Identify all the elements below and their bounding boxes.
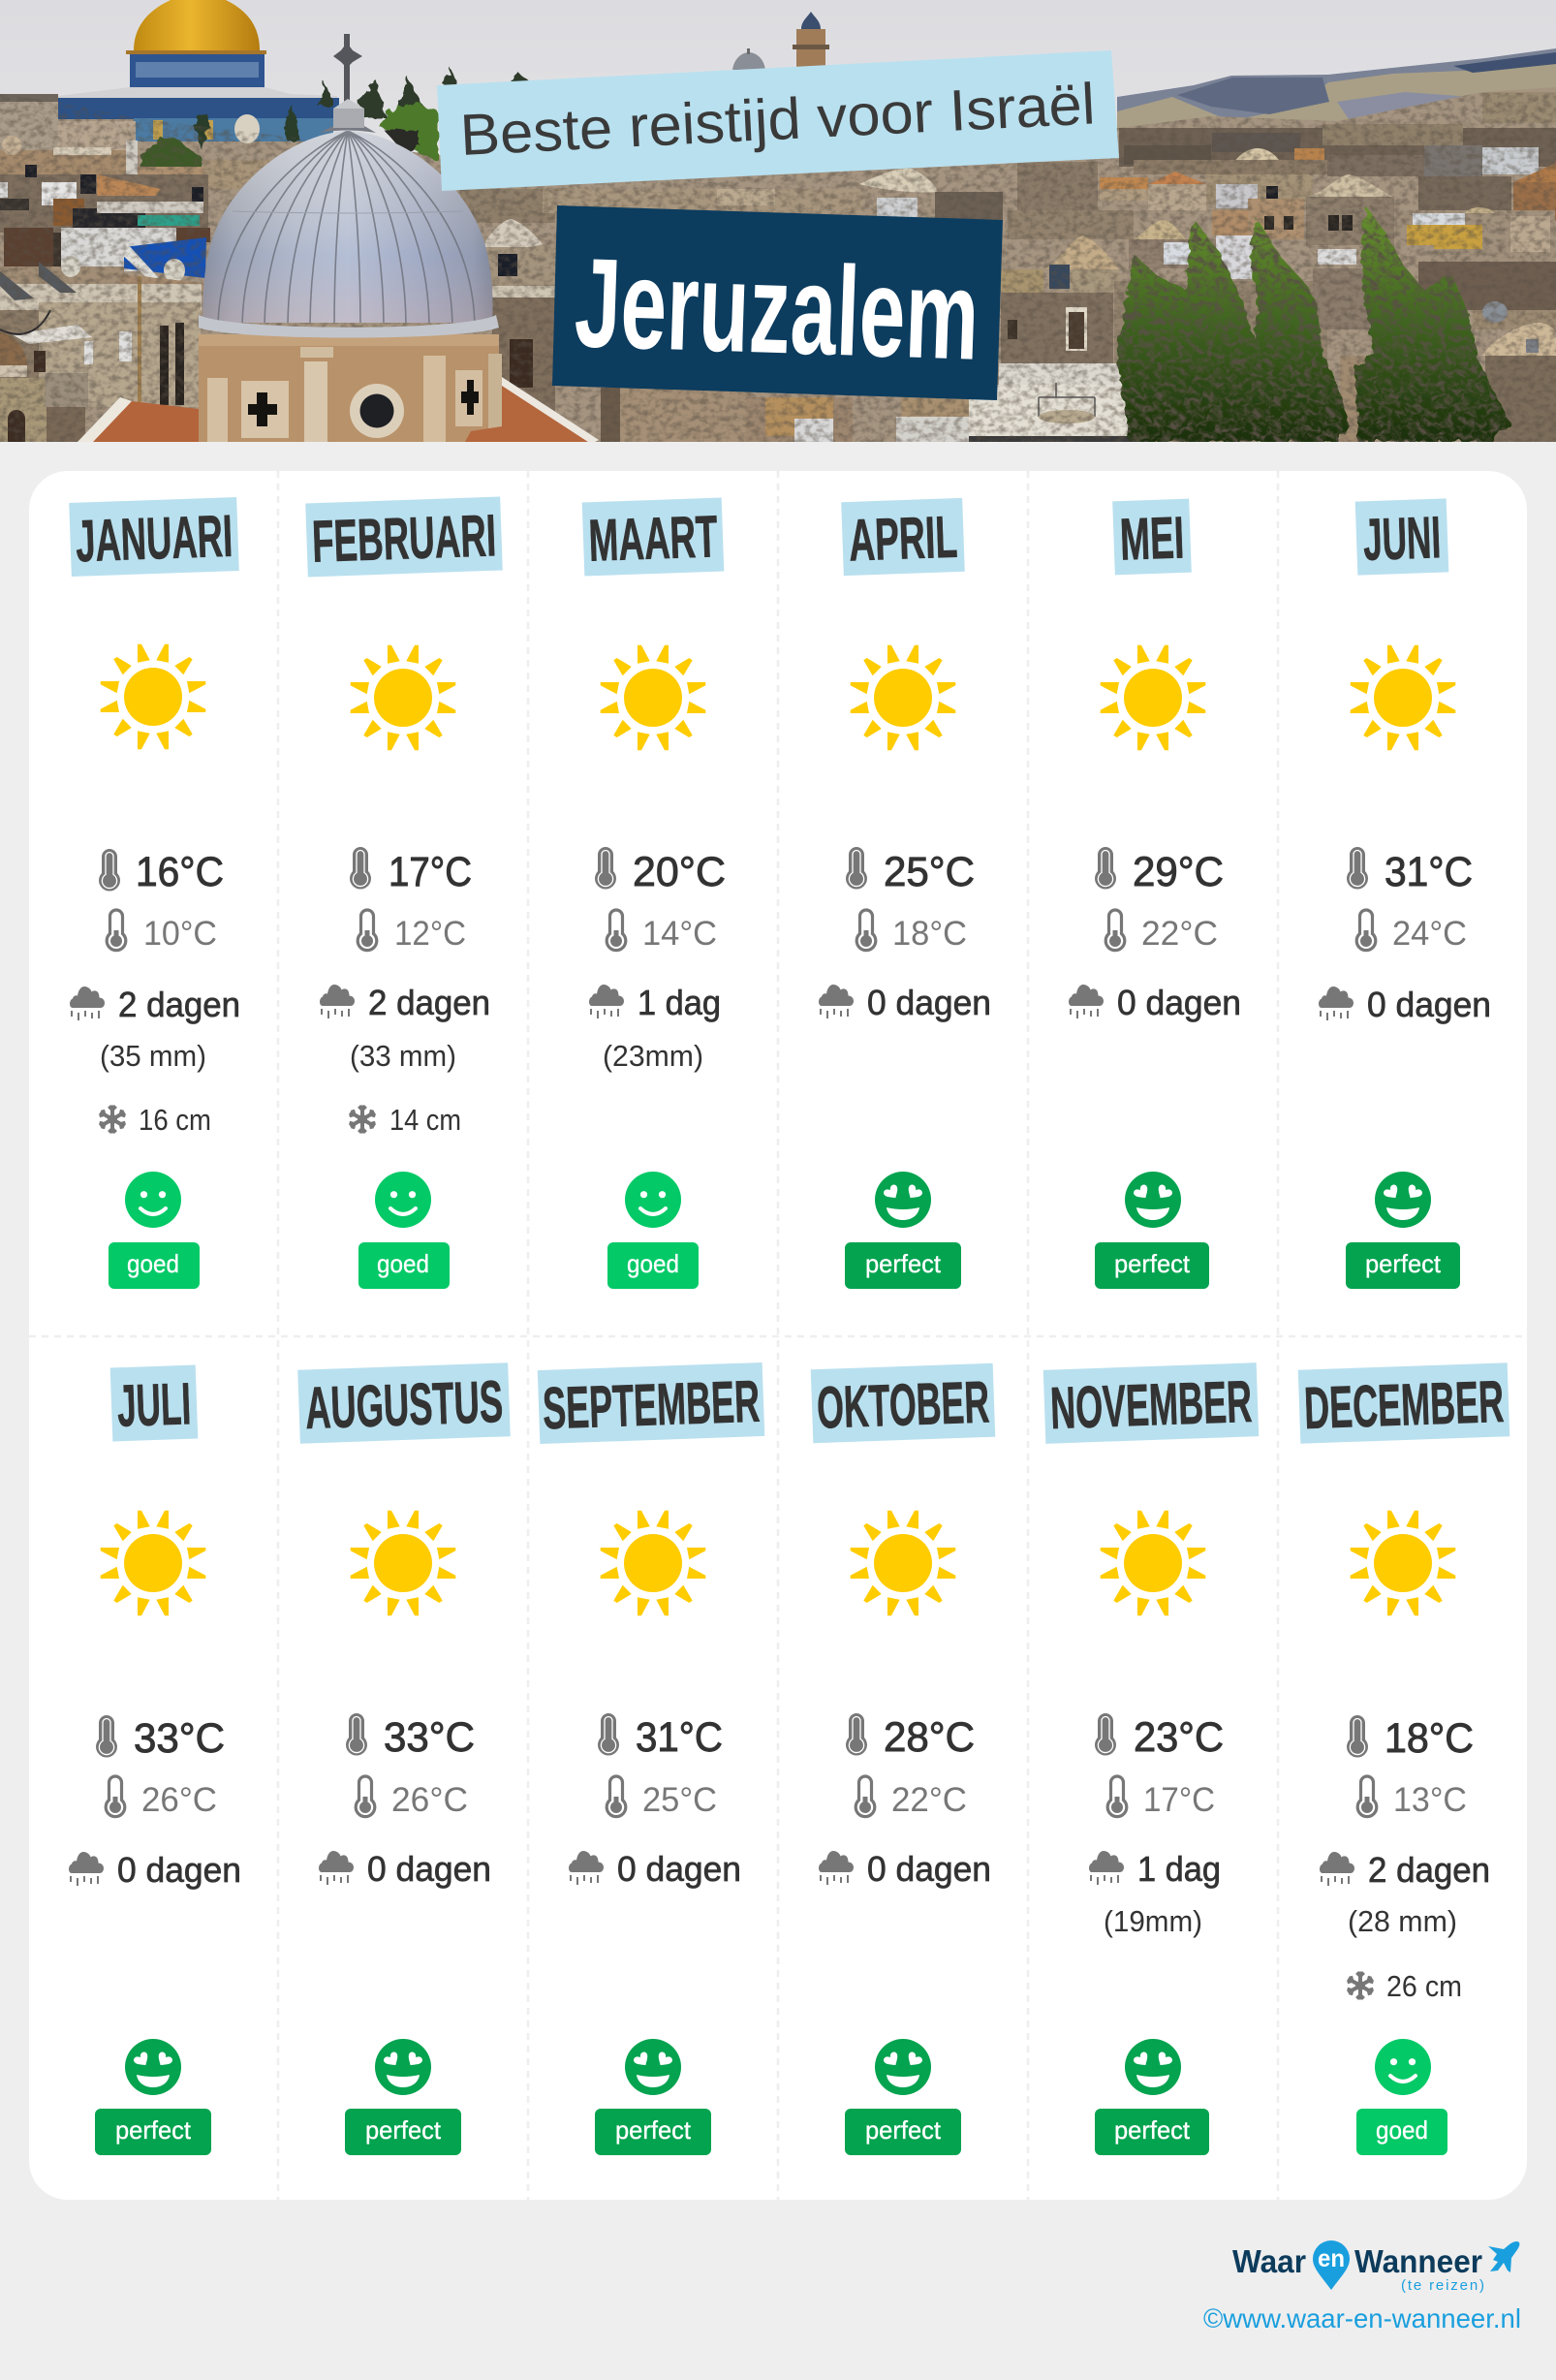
- panel: februari: [305, 497, 503, 1289]
- icon: rain: [1089, 1851, 1124, 1885]
- panel: juni: [1319, 498, 1491, 1289]
- low temperature: 26°C: [391, 1781, 468, 1819]
- high temperature: 20°C: [633, 849, 726, 895]
- rain days: 2 dagen: [368, 983, 490, 1022]
- rain days: 2 dagen: [1368, 1850, 1490, 1890]
- icon: thermometer low: [856, 910, 876, 951]
- rating pill: perfect: [1365, 1249, 1442, 1278]
- rain days: 1 dag: [1137, 1849, 1221, 1889]
- low temperature: 25°C: [642, 1781, 717, 1819]
- month tag: MAART: [587, 503, 719, 574]
- panel: mei: [1069, 499, 1241, 1289]
- silver dome church: [199, 99, 502, 442]
- header photo: Jerusalem skyline: [0, 0, 1556, 444]
- icon: sun: [601, 645, 705, 750]
- icon: sun: [101, 1511, 205, 1615]
- panel: oktober: [811, 1363, 995, 2155]
- icon: thermometer high: [1347, 1715, 1368, 1758]
- low temperature: 24°C: [1392, 915, 1467, 953]
- icon: thermometer high: [846, 847, 867, 890]
- cross on silver dome: [333, 34, 362, 104]
- icon: thermometer low: [607, 910, 626, 951]
- rainfall: (23mm): [603, 1039, 703, 1073]
- icon: smiley: [625, 2039, 681, 2095]
- icon: thermometer low: [1105, 910, 1125, 951]
- month tag: [69, 497, 239, 577]
- icon: smiley: [875, 2039, 931, 2095]
- icon: thermometer high: [96, 1715, 117, 1758]
- distant hill: [1117, 48, 1556, 128]
- icon: rain: [319, 1851, 354, 1885]
- icon: thermometer high: [846, 1713, 867, 1756]
- month tag: APRIL: [848, 504, 958, 573]
- icon: sun: [101, 644, 205, 749]
- high temperature: 33°C: [384, 1714, 475, 1761]
- icon: thermometer high: [595, 847, 616, 890]
- logo tagline: (te reizen): [1401, 2277, 1484, 2294]
- low temperature: 10°C: [143, 915, 217, 953]
- icon: sun: [351, 1511, 455, 1615]
- high temperature: 29°C: [1133, 849, 1224, 895]
- panel: september: [538, 1362, 764, 2155]
- month tag: OKTOBER: [816, 1368, 990, 1441]
- month tag: MEI: [1119, 504, 1185, 573]
- rating pill: [607, 1242, 699, 1289]
- rating pill: [1095, 1242, 1209, 1289]
- icon: thermometer low: [356, 1776, 375, 1817]
- panel: augustus: [297, 1362, 511, 2155]
- rating pill: perfect: [1114, 2115, 1191, 2145]
- rain days: 0 dagen: [367, 1849, 491, 1889]
- icon: thermometer low: [1107, 1776, 1127, 1817]
- panel: november: [1043, 1362, 1259, 2155]
- rating pill: perfect: [615, 2115, 692, 2145]
- rainfall: (33 mm): [350, 1039, 456, 1073]
- icon: smiley: [1125, 1172, 1181, 1228]
- month tag: [811, 1363, 995, 1443]
- icon: rain: [569, 1851, 604, 1885]
- month tag: [538, 1362, 764, 1444]
- low temperature: 13°C: [1393, 1781, 1467, 1819]
- month tag: NOVEMBER: [1049, 1368, 1253, 1441]
- icon: thermometer high: [598, 1713, 619, 1756]
- icon: sun: [1351, 645, 1455, 750]
- high temperature: 25°C: [884, 849, 975, 895]
- low temperature: 12°C: [394, 915, 466, 953]
- middle city buildings: [460, 169, 1008, 442]
- icon: rain: [1320, 1852, 1354, 1886]
- icon: thermometer low: [607, 1776, 626, 1817]
- rain days: 0 dagen: [117, 1850, 241, 1890]
- icon: sun: [851, 1511, 955, 1615]
- rating pill: perfect: [865, 2115, 942, 2145]
- cypress trees: [1114, 204, 1511, 442]
- icon: rain: [1069, 985, 1104, 1018]
- icon: rain: [320, 985, 355, 1018]
- icon: smiley: [1375, 1172, 1431, 1228]
- icon: thermometer high: [350, 847, 371, 890]
- low temperature: 22°C: [1141, 915, 1218, 953]
- icon: rain: [819, 985, 854, 1018]
- month tag: [110, 1364, 198, 1442]
- low temperature: 22°C: [891, 1781, 967, 1819]
- trees behind dome: [141, 68, 531, 170]
- icon: rain: [819, 1851, 854, 1885]
- red roofs: [78, 377, 599, 444]
- icon: sun: [1101, 1511, 1205, 1615]
- logo: Waar en Wanneer: [1232, 2240, 1519, 2294]
- rain days: 1 dag: [638, 983, 721, 1022]
- rating pill: perfect: [115, 2115, 192, 2145]
- rainfall: (35 mm): [100, 1039, 206, 1073]
- icon: sun: [601, 1511, 705, 1615]
- rating pill: [845, 2109, 961, 2155]
- panel: december: [1298, 1362, 1509, 2155]
- snowfall: 26 cm: [1386, 1969, 1462, 2003]
- icon: smiley: [1375, 2039, 1431, 2095]
- month tag: SEPTEMBER: [542, 1368, 761, 1441]
- rating pill: [109, 1242, 200, 1289]
- main calendar card: [29, 471, 1527, 2200]
- high temperature: 23°C: [1134, 1714, 1224, 1761]
- panel: maart: [582, 498, 726, 1289]
- low temperature: 18°C: [892, 915, 967, 953]
- high temperature: 17°C: [389, 849, 472, 895]
- low temperature: 26°C: [141, 1781, 217, 1819]
- icon: rain: [1319, 986, 1354, 1020]
- icon: rain: [70, 986, 105, 1020]
- month tag: [1112, 499, 1192, 575]
- rating pill: goed: [127, 1249, 179, 1278]
- rating pill: [845, 1242, 961, 1289]
- icon: sun: [1351, 1511, 1455, 1615]
- rating pill: goed: [627, 1249, 679, 1278]
- icon: sun: [851, 645, 955, 750]
- rainfall: (28 mm): [1348, 1904, 1457, 1938]
- title tag: Beste reistijd voor Israël: Beste reistijd voor Israël: [458, 71, 1097, 168]
- city base: [0, 87, 1556, 442]
- icon: thermometer low: [1356, 910, 1376, 951]
- month tag: AUGUSTUS: [304, 1368, 504, 1441]
- low temperature: 14°C: [642, 915, 717, 953]
- minaret and small dome: [732, 12, 829, 70]
- rainfall: (19mm): [1104, 1904, 1202, 1938]
- icon: snowflake: [99, 1105, 126, 1134]
- icon: smiley: [1125, 2039, 1181, 2095]
- snowfall: 16 cm: [139, 1103, 211, 1137]
- logo word: Wanneer: Wanneer: [1354, 2243, 1482, 2279]
- icon: smiley: [125, 1172, 181, 1228]
- icon: thermometer high: [1347, 847, 1368, 890]
- icon: smiley: [375, 1172, 431, 1228]
- month tag: JANUARI: [75, 503, 233, 574]
- icon: thermometer high: [99, 849, 120, 892]
- icon: thermometer high: [1095, 1713, 1116, 1756]
- rating pill: perfect: [365, 2115, 442, 2145]
- month tag: JUNI: [1362, 504, 1442, 573]
- rating pill: [1346, 1242, 1460, 1289]
- rating pill: perfect: [1114, 1249, 1191, 1278]
- rating pill: [95, 2109, 211, 2155]
- high temperature: 16°C: [136, 849, 224, 895]
- left city buildings: [0, 94, 210, 442]
- rating pill: [1356, 2109, 1447, 2155]
- icon: smiley: [875, 1172, 931, 1228]
- photo texture: [0, 93, 1556, 442]
- rain days: 2 dagen: [118, 985, 240, 1024]
- logo word: Waar: Waar: [1232, 2243, 1306, 2279]
- rain days: 0 dagen: [867, 983, 991, 1022]
- icon: rain: [69, 1852, 104, 1886]
- icon: thermometer low: [107, 910, 126, 951]
- logo word: en: en: [1318, 2245, 1345, 2272]
- rating pill: goed: [1376, 2115, 1428, 2145]
- icon: smiley: [625, 1172, 681, 1228]
- low temperature: 17°C: [1143, 1781, 1215, 1819]
- icon: snowflake: [349, 1105, 376, 1134]
- icon: sun: [351, 645, 455, 750]
- icon: thermometer low: [1357, 1776, 1377, 1817]
- rating pill: [358, 1242, 450, 1289]
- icon: thermometer low: [358, 910, 377, 951]
- month tag: [1355, 498, 1448, 576]
- icon: thermometer low: [106, 1776, 125, 1817]
- right city buildings: [969, 92, 1556, 442]
- icon: smiley: [375, 2039, 431, 2095]
- title tag: Beste reistijd voor Israël: [437, 50, 1119, 191]
- rain days: 0 dagen: [617, 1849, 741, 1889]
- high temperature: 31°C: [636, 1714, 723, 1761]
- icon: snowflake: [1347, 1971, 1374, 2000]
- rating pill: [345, 2109, 461, 2155]
- Dome of the Rock: [57, 0, 339, 143]
- month tag: FEBRUARI: [311, 502, 497, 575]
- high temperature: 33°C: [134, 1715, 225, 1762]
- panel: januari: [69, 497, 240, 1289]
- rating pill: goed: [377, 1249, 429, 1278]
- icon: thermometer low: [856, 1776, 875, 1817]
- month tag: [305, 497, 503, 577]
- rain days: 0 dagen: [1367, 985, 1491, 1024]
- high temperature: 18°C: [1385, 1715, 1474, 1762]
- rating pill: [595, 2109, 711, 2155]
- icon: map pin: [1313, 2240, 1350, 2290]
- high temperature: 31°C: [1385, 849, 1473, 895]
- month tag: [841, 498, 965, 576]
- month tag: JULI: [116, 1370, 192, 1439]
- icon: thermometer high: [1095, 847, 1116, 890]
- rain days: 0 dagen: [1117, 983, 1241, 1022]
- icon: thermometer high: [346, 1713, 367, 1756]
- city tag: Jeruzalem: Jeruzalem: [573, 231, 981, 387]
- rating pill: perfect: [865, 1249, 942, 1278]
- month tag: [297, 1362, 511, 1444]
- icon: smiley: [125, 2039, 181, 2095]
- icon: rain: [589, 985, 624, 1018]
- rain days: 0 dagen: [867, 1849, 991, 1889]
- panel: april: [819, 498, 991, 1289]
- snowfall: 14 cm: [389, 1103, 461, 1137]
- rating pill: [1095, 2109, 1209, 2155]
- high temperature: 28°C: [884, 1714, 975, 1761]
- icon: airplane: [1488, 2241, 1519, 2272]
- city tag: Jeruzalem: [552, 205, 1003, 400]
- icon: sun: [1101, 645, 1205, 750]
- month tag: [1043, 1362, 1259, 1444]
- panel: juli: [69, 1364, 241, 2155]
- website url: ©www.waar-en-wanneer.nl: [1203, 2303, 1521, 2333]
- month tag: [582, 498, 724, 576]
